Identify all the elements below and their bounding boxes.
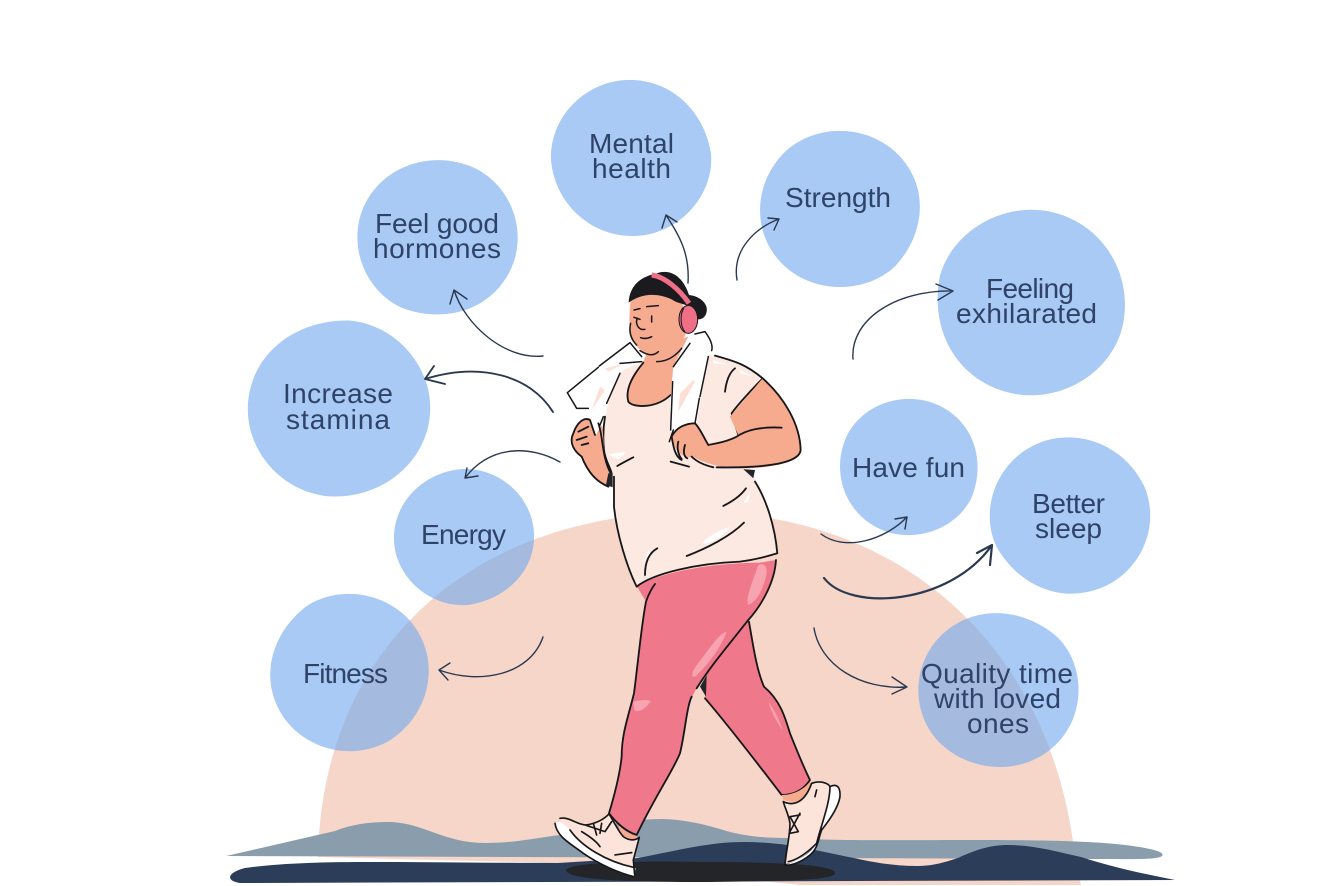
bubble: Mental health: [551, 80, 711, 236]
arrow to Quality time: [814, 628, 907, 694]
bubble: Feeling exhilarated: Feeling: [986, 273, 1074, 304]
bubble: Feeling exhilarated: exhilarated: [956, 298, 1097, 329]
jogger figure: [555, 272, 840, 877]
upper body: torso, head and arms: [567, 272, 801, 587]
arrow to Feel good hormones: [450, 290, 543, 356]
arrow to Feeling exhilarated: [853, 284, 953, 359]
bubble: Energy: Energy: [421, 519, 506, 550]
bubble: Feel good hormones: Feel good: [375, 208, 499, 239]
headphones: [652, 275, 698, 333]
bubble: Mental health: health: [592, 153, 671, 184]
bubble: Better sleep: Better: [1032, 488, 1105, 519]
chest and neck: [627, 337, 688, 406]
bubble: Energy: [394, 469, 534, 605]
arrow to Better sleep: [824, 545, 992, 598]
peach sun background: [318, 512, 1081, 885]
bubble: Feel good hormones: hormones: [373, 233, 501, 264]
bubble: Increase stamina: stamina: [286, 404, 390, 435]
lower body: leggings and shoes: [555, 560, 840, 877]
bubble: Strength: [726, 99, 954, 319]
arrow to Have fun: [821, 517, 907, 543]
arrow to Strength: [736, 218, 779, 280]
left arm and hand: [572, 418, 612, 487]
face: [629, 292, 687, 355]
bubble: Quality time with loved ones: [886, 580, 1111, 800]
back leg: [705, 620, 810, 795]
bubble: Better sleep: [967, 415, 1173, 616]
right arm and hand: [672, 378, 801, 468]
bubble: Have fun: [813, 374, 1005, 560]
bubble: Increase stamina: [234, 306, 445, 511]
arrow to Energy: [465, 451, 560, 478]
bubble: Fitness: Fitness: [303, 658, 388, 689]
ground shadow: [566, 862, 835, 882]
bubble: Quality time with loved ones: ones: [967, 708, 1029, 739]
arrow to Fitness: [439, 637, 543, 680]
bubble: Mental health: Mental: [589, 128, 674, 159]
bubble: Have fun: Have fun: [852, 452, 965, 483]
shirt: [603, 355, 777, 587]
arrow to Increase stamina: [425, 366, 553, 412]
hair: [629, 272, 707, 319]
bubble: Feel good hormones: [328, 130, 547, 345]
back ankle: [782, 782, 813, 805]
ground: grey hills: [226, 819, 1163, 859]
front leg: [609, 560, 776, 835]
bubble: Feeling exhilarated: [909, 184, 1153, 421]
bubble: Better sleep: sleep: [1035, 513, 1102, 544]
bubble: Quality time with loved ones: Quality time: [921, 658, 1073, 689]
towel: [567, 332, 712, 443]
arrow to Mental health: [662, 215, 688, 283]
bubble: Quality time with loved ones: with loved: [933, 683, 1061, 714]
bubble: Fitness: [240, 565, 459, 780]
bubble: Increase stamina: Increase: [283, 378, 393, 409]
back shoe: [783, 782, 830, 864]
bubble: Strength: Strength: [785, 182, 891, 213]
front shoe: [560, 814, 639, 875]
ground: navy hills: [230, 842, 1175, 883]
shirt highlights: [608, 360, 753, 563]
front ankle: [618, 825, 637, 843]
